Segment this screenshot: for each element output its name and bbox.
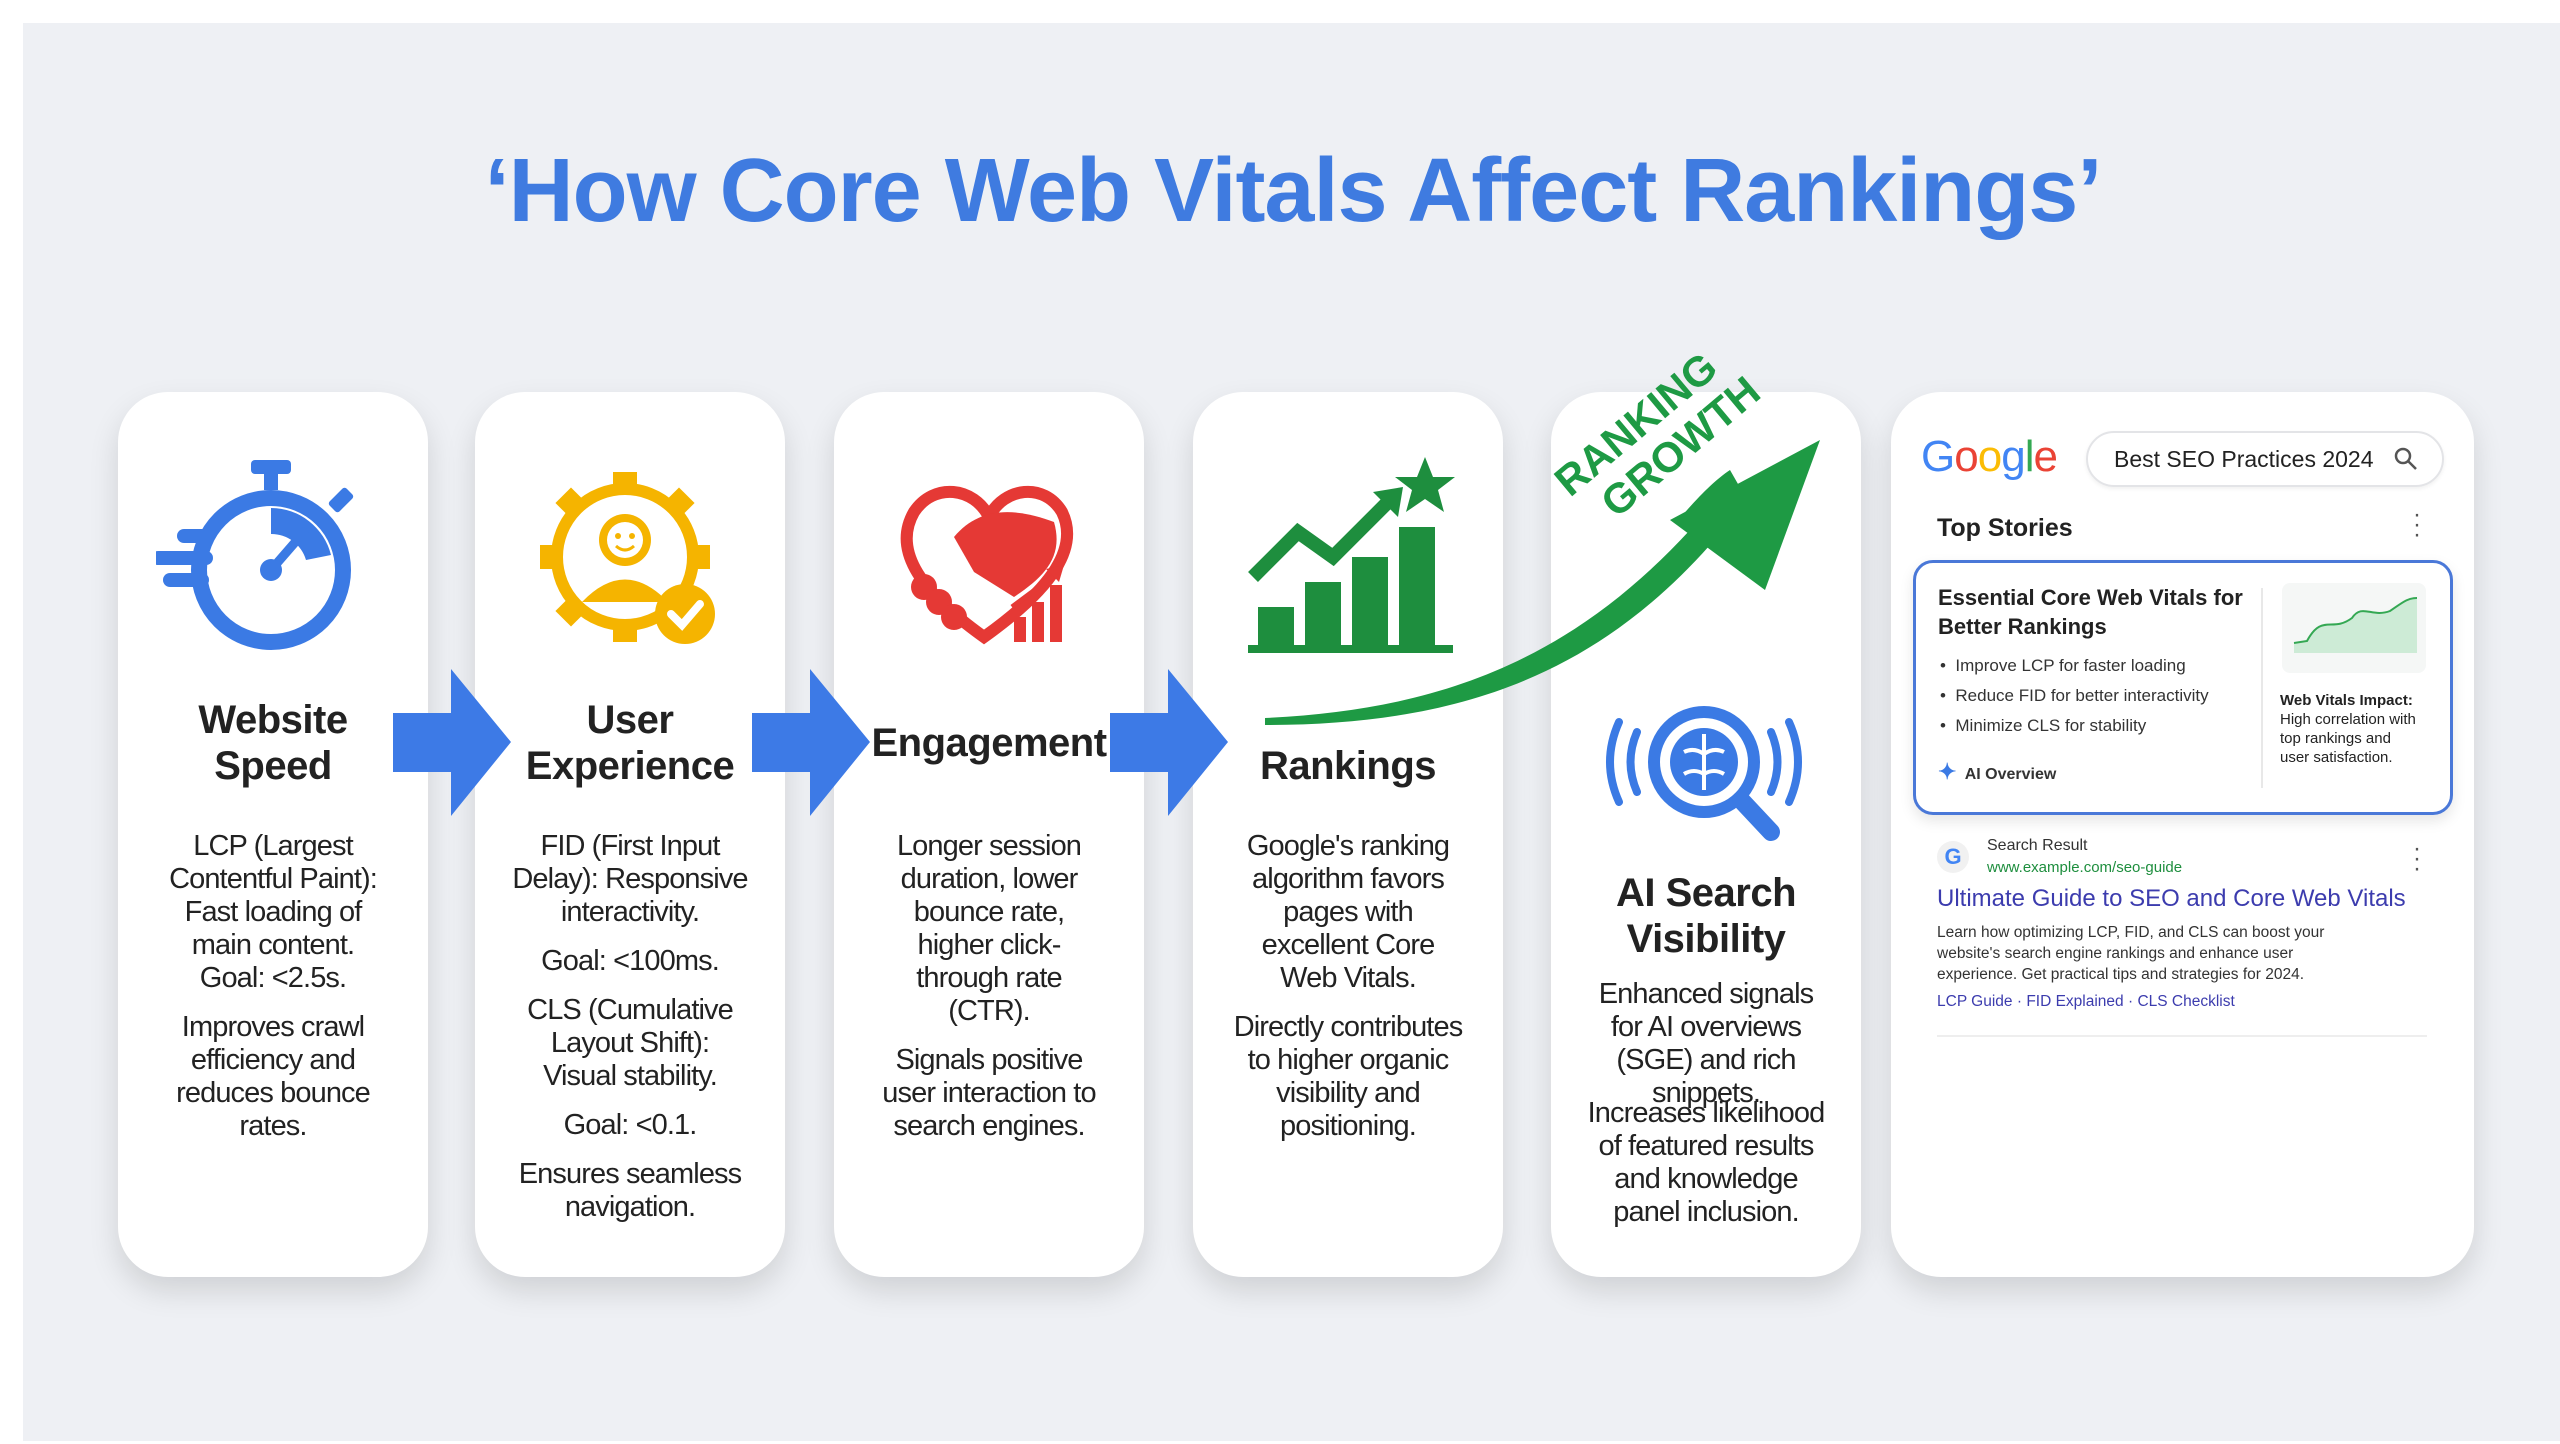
text block: (CTR). xyxy=(948,995,1030,1027)
arrow 1 xyxy=(393,669,511,816)
search box xyxy=(2086,431,2444,487)
search result: Ultimate Guide to SEO and Core Web Vitals xyxy=(1937,885,2406,912)
icon: growth chart xyxy=(1248,457,1455,653)
icon: stopwatch xyxy=(156,460,354,650)
text block: Ensures seamless xyxy=(519,1158,741,1190)
text block: main content. xyxy=(192,929,354,961)
text block xyxy=(512,830,748,1223)
text block: navigation. xyxy=(565,1191,695,1223)
text block: rates. xyxy=(239,1110,307,1142)
search box: Best SEO Practices 2024 xyxy=(2114,446,2374,472)
heading xyxy=(198,698,348,788)
text block: Web Vitals. xyxy=(1280,962,1416,994)
text block: positioning. xyxy=(1280,1110,1416,1142)
text block: Enhanced signals xyxy=(1599,978,1813,1010)
panel: google search results: · xyxy=(2413,835,2421,862)
search result: website's search engine rankings and enhance user xyxy=(1937,945,2293,962)
text block: Goal: <0.1. xyxy=(564,1109,696,1141)
text: web vitals impact xyxy=(2280,692,2416,766)
panel: rankings xyxy=(1193,392,1503,1277)
text block: Delay): Responsive xyxy=(512,863,748,895)
panel: user experience xyxy=(475,392,785,1277)
text block: snippets. xyxy=(1652,1077,1760,1109)
panel: engagement xyxy=(834,392,1144,1277)
text block: excellent Core xyxy=(1262,929,1434,961)
chart: mini trend xyxy=(2282,583,2426,673)
text block: Contentful Paint): xyxy=(169,863,377,895)
text: web vitals impact: user satisfaction. xyxy=(2280,749,2393,766)
text block: for AI overviews xyxy=(1611,1011,1801,1043)
text block: through rate xyxy=(916,962,1062,994)
search result: Search Result xyxy=(1987,837,2088,854)
panel: google search results: · xyxy=(2413,855,2421,882)
heading: Engagement xyxy=(871,721,1107,765)
search result: LCP Guide · FID Explained · CLS Checklist xyxy=(1937,993,2235,1010)
text block: of featured results xyxy=(1598,1130,1814,1162)
text block: search engines. xyxy=(893,1110,1085,1142)
text block: visibility and xyxy=(1276,1077,1420,1109)
search result: www.example.com/seo-guide xyxy=(1987,859,2182,876)
heading: Speed xyxy=(214,744,332,788)
google logo: Google xyxy=(1921,432,2057,481)
arrow: ranking growth xyxy=(1265,343,1820,725)
text block: Increases likelihood xyxy=(1588,1097,1824,1129)
search result xyxy=(1937,837,2427,1037)
text block: Longer session xyxy=(897,830,1081,862)
text block: reduces bounce xyxy=(176,1077,370,1109)
text block: Goal: <100ms. xyxy=(541,945,719,977)
bullet list: • Minimize CLS for stability xyxy=(1940,716,2146,735)
text block xyxy=(169,830,377,1142)
text block xyxy=(882,830,1096,1142)
text block: Visual stability. xyxy=(543,1060,717,1092)
text block: user interaction to xyxy=(882,1077,1096,1109)
panel: google search results: · xyxy=(2413,845,2421,872)
title: ‘How Core Web Vitals Affect Rankings’ xyxy=(485,141,2101,241)
panel: AI search visibility xyxy=(1551,392,1861,1277)
featured story card: Better Rankings xyxy=(1938,614,2107,639)
icon: brain magnifier xyxy=(1606,706,1802,841)
text block: Directly contributes xyxy=(1234,1011,1462,1043)
label: ranking growth: RANKING xyxy=(1546,343,1726,505)
icon: heart handshake xyxy=(900,486,1074,644)
heading: User xyxy=(587,698,673,742)
text block: Fast loading of xyxy=(185,896,361,928)
icon: search xyxy=(2394,448,2417,470)
heading xyxy=(1616,871,1796,961)
text block: algorithm favors xyxy=(1252,863,1444,895)
panel: website speed xyxy=(118,392,428,1277)
text block: Goal: <2.5s. xyxy=(200,962,346,994)
bullet list: • Improve LCP for faster loading xyxy=(1940,656,2186,675)
heading: Visibility xyxy=(1627,917,1785,961)
label: ranking growth xyxy=(1546,332,1769,540)
text block: efficiency and xyxy=(191,1044,355,1076)
text block xyxy=(1234,830,1462,1142)
heading: Website xyxy=(198,698,348,742)
bullet list xyxy=(1940,656,2209,735)
heading xyxy=(526,698,734,788)
text block: panel inclusion. xyxy=(1613,1196,1799,1228)
arrow 3 xyxy=(1110,669,1228,816)
icon: google G xyxy=(1937,841,1969,873)
search result: experience. Get practical tips and strategies for 2024. xyxy=(1937,966,2304,983)
text block: and knowledge xyxy=(1614,1163,1798,1195)
text: web vitals impact: Web Vitals Impact: xyxy=(2280,692,2413,709)
text block: (SGE) and rich xyxy=(1616,1044,1796,1076)
text block xyxy=(1588,978,1824,1228)
text block: FID (First Input xyxy=(541,830,719,862)
AI overview badge: ✦ AI Overview xyxy=(1938,759,2056,784)
label: ranking growth: GROWTH xyxy=(1592,367,1769,526)
panel: google search results: · xyxy=(2413,501,2421,528)
text block: interactivity. xyxy=(561,896,699,928)
heading: Rankings xyxy=(1260,744,1436,788)
search result: Learn how optimizing LCP, FID, and CLS can boost your xyxy=(1937,924,2324,941)
icon: google G: G xyxy=(1944,844,1962,869)
text block: Layout Shift): xyxy=(551,1027,709,1059)
text block: pages with xyxy=(1283,896,1413,928)
panel: google search results: · xyxy=(2413,511,2421,538)
bullet list: • Reduce FID for better interactivity xyxy=(1940,686,2209,705)
arrow 2 xyxy=(752,669,870,816)
featured story card: Essential Core Web Vitals for xyxy=(1938,585,2243,610)
text block: CLS (Cumulative xyxy=(527,994,733,1026)
text block: duration, lower xyxy=(901,863,1077,895)
text: web vitals impact: High correlation with xyxy=(2280,711,2416,728)
text block: Google's ranking xyxy=(1247,830,1449,862)
panel: google search results xyxy=(1891,392,2474,1277)
icon: gear with user xyxy=(540,472,715,644)
heading: Experience xyxy=(526,744,734,788)
text block: Signals positive xyxy=(895,1044,1083,1076)
heading: top stories: Top Stories xyxy=(1937,514,2073,542)
featured story card xyxy=(1913,560,2453,815)
heading: AI Search xyxy=(1616,871,1796,915)
text block: to higher organic xyxy=(1248,1044,1448,1076)
panel: google search results: · xyxy=(2413,521,2421,548)
text: web vitals impact: top rankings and xyxy=(2280,730,2391,747)
text block: bounce rate, xyxy=(914,896,1064,928)
text block: LCP (Largest xyxy=(193,830,353,862)
text block: higher click- xyxy=(917,929,1060,961)
text block: Improves crawl xyxy=(182,1011,364,1043)
